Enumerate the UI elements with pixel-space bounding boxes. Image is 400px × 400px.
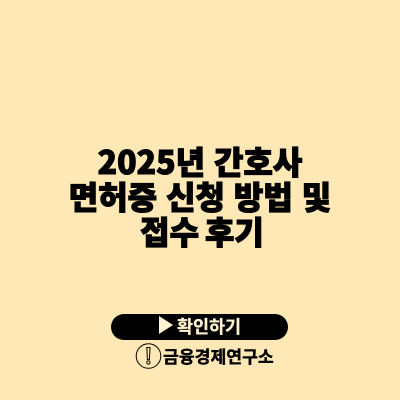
icon: exclamation in circle xyxy=(136,343,162,369)
title xyxy=(69,138,331,254)
icon: play triangle xyxy=(159,316,173,334)
title: 면허증 신청 방법 및 xyxy=(69,173,331,219)
brand name: 금융경제연구소 xyxy=(163,343,274,368)
title: 2025년 간호사 xyxy=(98,138,302,184)
button label: 확인하기 xyxy=(177,314,241,339)
title: 접수 후기 xyxy=(140,208,264,254)
button: 확인하기 xyxy=(111,314,288,340)
